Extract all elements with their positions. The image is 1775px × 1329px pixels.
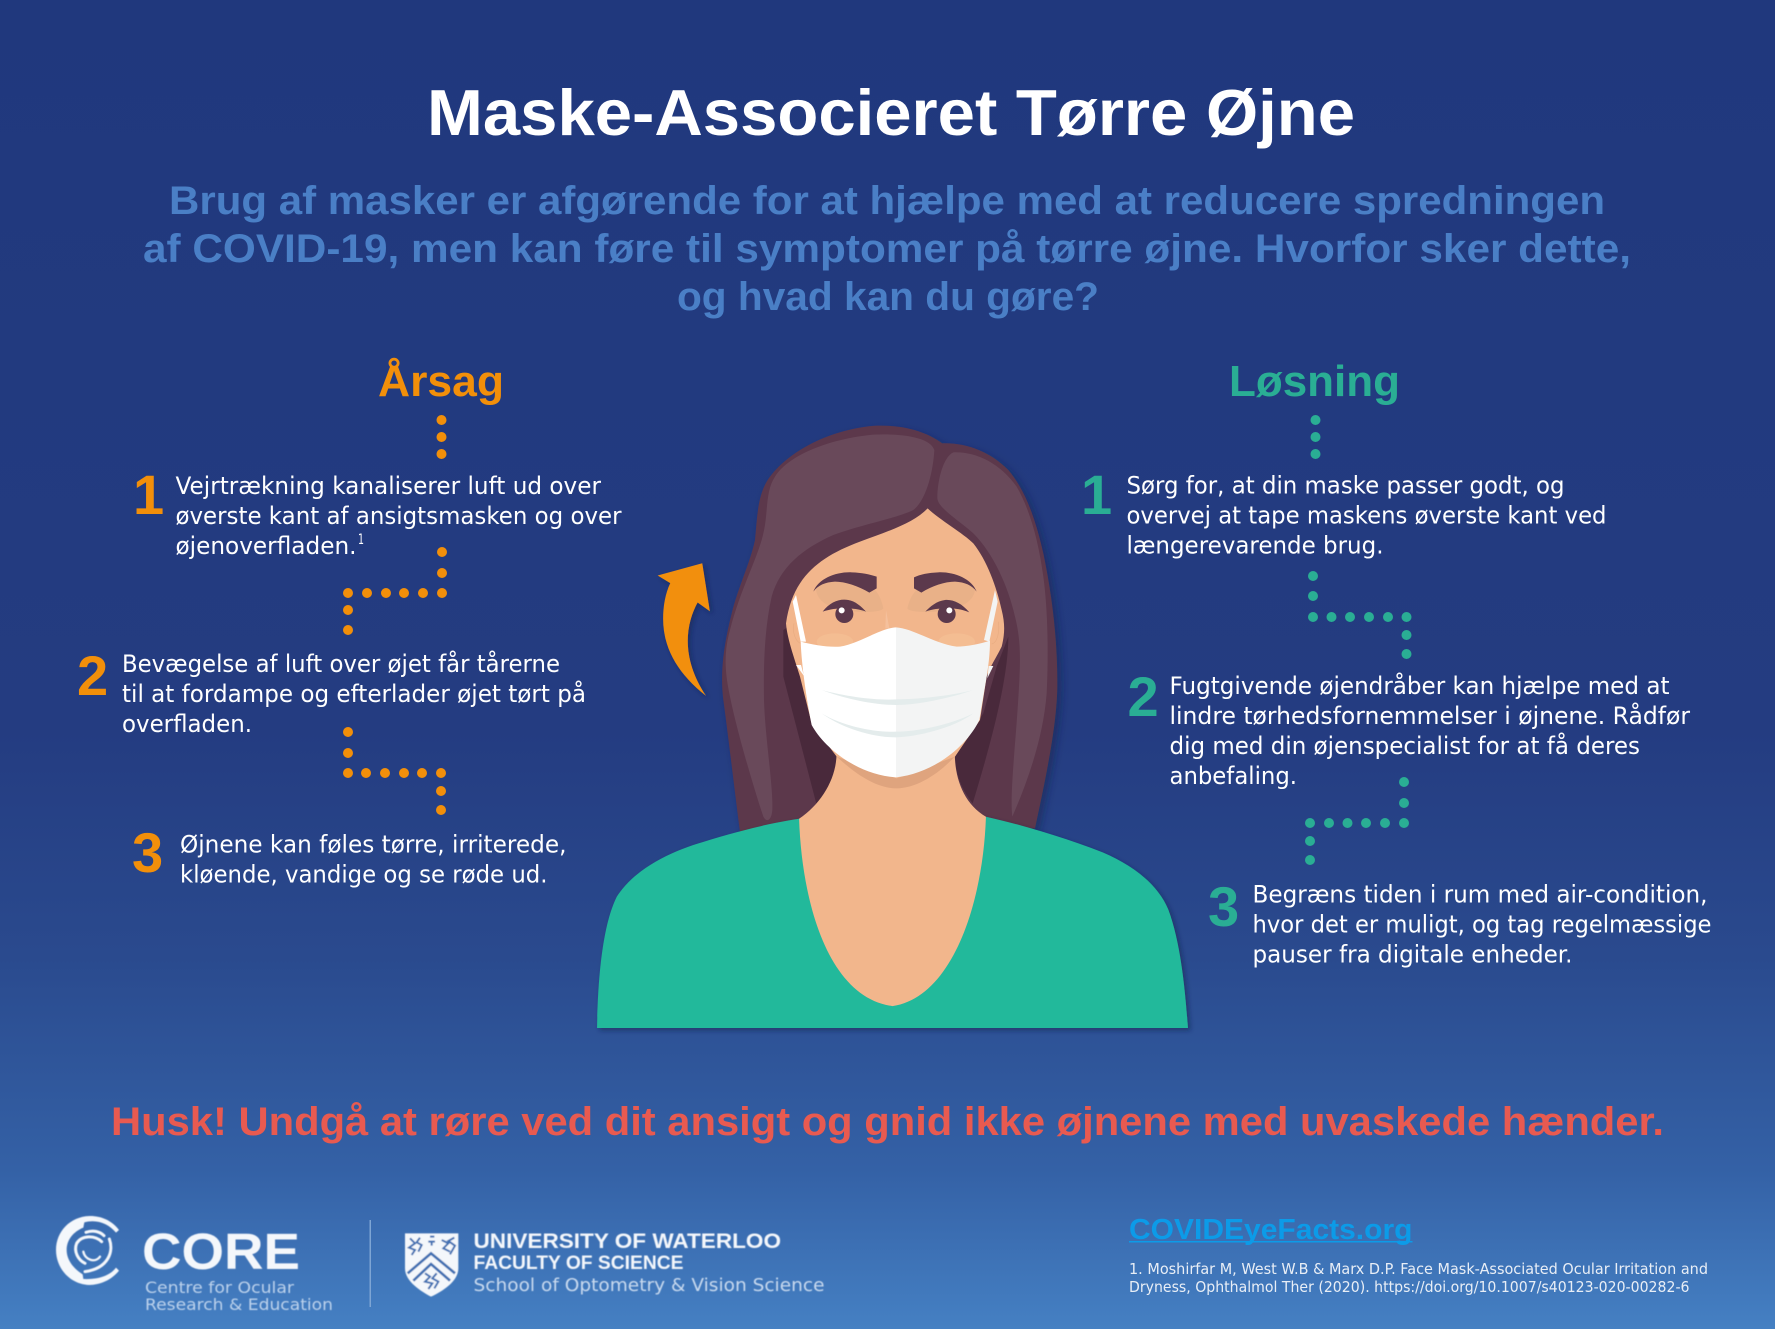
shirt bbox=[597, 817, 1188, 1028]
step 2 text: dig med din øjenspecialist for at få deres bbox=[1170, 731, 1640, 760]
tagline bbox=[145, 1278, 333, 1314]
step 2 text: Fugtgivende øjendråber kan hjælpe med at bbox=[1170, 671, 1670, 700]
face with mask bbox=[786, 508, 1004, 788]
reminder callout: Husk! Undgå at røre ved dit ansigt og gnid ikke øjnene med uvaskede hænder. bbox=[111, 1100, 1664, 1144]
dotted connector: heading to step 1 bbox=[436, 415, 446, 459]
title: Maske-Associeret Tørre Øjne bbox=[427, 76, 1355, 149]
cheeks bbox=[817, 633, 975, 650]
neck bbox=[799, 754, 986, 1006]
logo divider bbox=[370, 1220, 371, 1307]
hair bbox=[722, 426, 1057, 832]
step 3 number: 3 bbox=[132, 821, 163, 884]
step 1 text: øjenoverfladen. bbox=[176, 532, 356, 560]
tagline: Centre for Ocular bbox=[145, 1278, 294, 1297]
eyes and eyebrows bbox=[813, 572, 977, 650]
website link: COVIDEyeFacts.org bbox=[1129, 1214, 1412, 1246]
wordmark: CORE: CORE bbox=[142, 1223, 300, 1280]
panel: solution (Løsning) bbox=[1081, 357, 1712, 968]
dotted connector: step 2 to step 3 bbox=[1305, 777, 1409, 865]
step 3 text: kløende, vandige og se røde ud. bbox=[180, 860, 548, 888]
step 1 text bbox=[1126, 472, 1606, 560]
step 1 number: 1 bbox=[133, 463, 164, 526]
mask straps bbox=[793, 590, 998, 678]
step 3 number: 3 bbox=[1208, 875, 1239, 938]
subtitle text block: Brug af masker er afgørende for at hjælpe med at reducere spredningen bbox=[169, 179, 1605, 223]
panel: cause (Årsag) bbox=[77, 357, 622, 888]
step 1 text: Sørg for, at din maske passer godt, og bbox=[1126, 472, 1564, 500]
neck shadow bbox=[837, 747, 956, 788]
step 1 text: overvej at tape maskens øverste kant ved bbox=[1126, 502, 1606, 530]
icon: CORE rings bbox=[56, 1216, 119, 1285]
step 1 text: 1 bbox=[358, 532, 364, 548]
eyes bbox=[823, 600, 969, 623]
step 3 text: pauser fra digitale enheder. bbox=[1252, 940, 1572, 968]
face mask bbox=[801, 627, 990, 777]
step 2 text: lindre tørhedsfornemmelser i øjnene. Rådfør bbox=[1170, 701, 1690, 730]
step 1 text: Vejrtrækning kanaliserer luft ud over bbox=[176, 472, 601, 500]
step 2 text: anbefaling. bbox=[1170, 762, 1297, 790]
ear lines bbox=[793, 622, 999, 644]
step 2 text bbox=[1170, 671, 1690, 790]
face and ears bbox=[786, 508, 1004, 778]
step 3 text bbox=[180, 830, 566, 888]
step 2 text bbox=[122, 649, 586, 738]
subtitle text block: af COVID-19, men kan føre til symptomer på tørre øjne. Hvorfor sker dette, bbox=[143, 227, 1631, 271]
eye shadows bbox=[816, 582, 975, 612]
reference citation: Dryness, Ophthalmol Ther (2020). https://doi.org/10.1007/s40123-020-00282-6 bbox=[1129, 1278, 1690, 1296]
illustration: woman wearing a face mask bbox=[597, 426, 1188, 1028]
icon: upward orange arrow bbox=[658, 563, 710, 696]
icon: shield crest bbox=[405, 1233, 458, 1297]
dotted connector: step 1 to step 2 bbox=[1308, 571, 1412, 659]
dotted connector: step 2 to step 3 bbox=[343, 727, 446, 815]
step 3 text bbox=[1252, 880, 1712, 968]
university wordmark: UNIVERSITY OF WATERLOO bbox=[474, 1230, 781, 1253]
reference citation: 1. Moshirfar M, West W.B & Marx D.P. Face Mask-Associated Ocular Irritation and bbox=[1129, 1260, 1708, 1278]
dotted connector: heading to step 1 bbox=[1310, 415, 1320, 459]
tagline: Research & Education bbox=[145, 1295, 333, 1314]
step 2 number: 2 bbox=[77, 644, 108, 707]
step 1 text: øverste kant af ansigtsmasken og over bbox=[176, 502, 622, 530]
eyebrows bbox=[813, 572, 977, 593]
subtitle text block: og hvad kan du gøre? bbox=[677, 275, 1099, 319]
step 3 text: Begræns tiden i rum med air-condition, bbox=[1252, 880, 1708, 908]
step 1 text bbox=[176, 472, 622, 560]
subtitle text block bbox=[143, 179, 1631, 319]
step 2 text: Bevægelse af luft over øjet får tårerne bbox=[122, 649, 560, 678]
logo: University of Waterloo bbox=[405, 1230, 824, 1297]
step 1 text: længerevarende brug. bbox=[1126, 532, 1384, 560]
university wordmark: FACULTY OF SCIENCE bbox=[474, 1253, 684, 1274]
heading: Løsning: Løsning bbox=[1229, 357, 1400, 406]
heading: Årsag: Årsag bbox=[378, 357, 504, 406]
logo: CORE bbox=[56, 1216, 333, 1314]
university wordmark bbox=[474, 1230, 824, 1296]
reference citation bbox=[1129, 1260, 1708, 1296]
step 2 number: 2 bbox=[1128, 665, 1159, 728]
step 1 number: 1 bbox=[1081, 463, 1112, 526]
university wordmark: School of Optometry & Vision Science bbox=[474, 1275, 824, 1296]
dotted connector: step 1 to step 2 bbox=[343, 547, 447, 635]
step 2 text: til at fordampe og efterlader øjet tørt på bbox=[122, 679, 586, 708]
step 2 text: overfladen. bbox=[122, 710, 252, 738]
nose highlight bbox=[885, 610, 889, 628]
step 3 text: hvor det er muligt, og tag regelmæssige bbox=[1252, 910, 1712, 938]
step 3 text: Øjnene kan føles tørre, irriterede, bbox=[180, 830, 566, 858]
